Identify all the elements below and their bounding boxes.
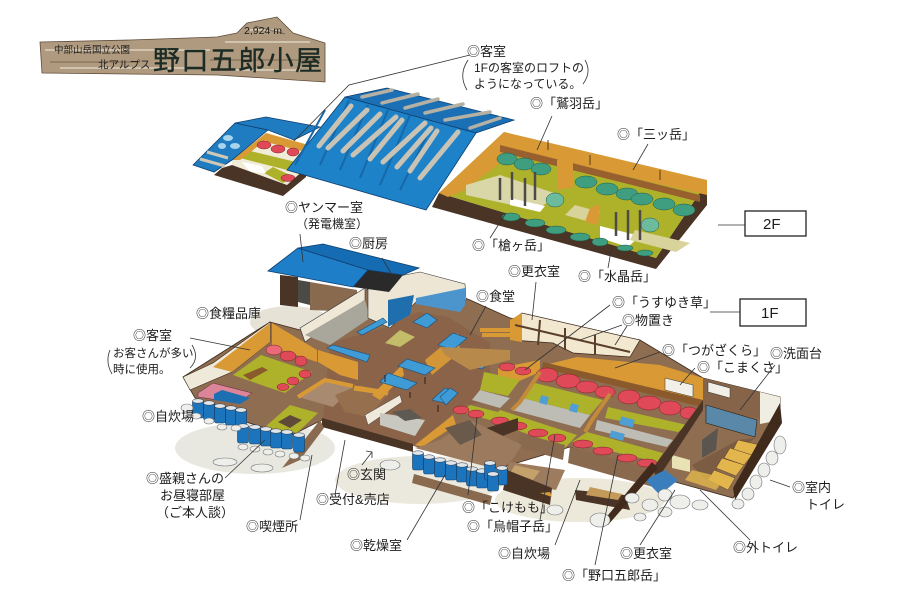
floor 2 tag: [718, 211, 806, 236]
label: eboshi: ◎「烏帽子岳」: [467, 519, 558, 534]
floor 2 illustration: [193, 88, 707, 269]
label: nap room: ◎盛親さんの: [146, 471, 224, 486]
label: indoor toilet: ◎室内: [792, 480, 831, 495]
bunks of room block B: [512, 372, 698, 487]
label: food storage: ◎食糧品庫: [196, 306, 261, 321]
label: nap room: [146, 471, 234, 520]
label: yanmar room: [285, 200, 368, 231]
label: self-catering left: ◎自炊場: [142, 409, 194, 424]
arrow: entrance: [362, 451, 372, 465]
label: entrance: ◎玄関: [347, 467, 386, 482]
leader lines: [190, 55, 790, 565]
busy note: お客さんが多い: [113, 346, 194, 360]
dark outer walls: [282, 400, 782, 500]
label: self-catering right: ◎自炊場: [498, 546, 550, 561]
label: washiba: ◎「鷲羽岳」: [530, 96, 608, 111]
label: usuyukiso: ◎「うすゆき草」: [612, 295, 716, 310]
roof logs front: [319, 106, 458, 178]
label: storage: ◎物置き: [622, 313, 674, 328]
left guest room: [183, 322, 317, 404]
floor 2 tag: 2F: [763, 216, 781, 233]
region: 北アルプス: [98, 59, 150, 71]
title sign: [40, 17, 325, 82]
label: guest room 1F: [108, 328, 196, 376]
label: outdoor toilet: ◎外トイレ: [733, 540, 798, 555]
olive floor and wooden walls: [432, 132, 707, 269]
label: yarigatake: ◎「槍ヶ岳」: [472, 238, 550, 253]
middle rooms: [265, 333, 460, 447]
label: kokemomo: ◎「こけもも」: [462, 500, 553, 515]
label: guest room 1F: ◎客室: [133, 328, 172, 343]
hut name: 野口五郎小屋: [153, 46, 323, 76]
floor 1 illustration: [175, 244, 786, 527]
floor 1 tag: [710, 299, 806, 326]
label: indoor toilet: トイレ: [806, 497, 845, 512]
label: yanmar room: ◎ヤンマー室: [285, 200, 363, 215]
label: mitsudake: ◎「三ッ岳」: [617, 127, 695, 142]
label: drying room: ◎乾燥室: [350, 538, 402, 553]
label: changing room 2: ◎更衣室: [620, 546, 672, 561]
dining tables: [327, 313, 495, 412]
back wall and shelves of large room: [440, 313, 703, 407]
label: guest room 1F: 時に使用。: [113, 362, 170, 376]
label: guest room loft: ◎客室: [467, 44, 506, 59]
label: indoor toilet: [792, 480, 845, 512]
label: changing room 1: ◎更衣室: [508, 264, 560, 279]
main wooden floor: [183, 280, 780, 498]
label: komakusa: ◎「こまくさ」: [697, 360, 788, 375]
label: noguchigoro: ◎「野口五郎岳」: [562, 568, 666, 583]
label: dining: ◎食堂: [476, 289, 515, 304]
label: yanmar room: （発電機室）: [296, 217, 368, 231]
ground wash: [175, 306, 665, 522]
label: reception and shop: ◎受付&売店: [316, 492, 390, 507]
elevation: 2,924 m: [244, 25, 282, 37]
label: kitchen: ◎厨房: [349, 236, 388, 251]
water barrels: [192, 399, 508, 491]
green futons front: [502, 213, 520, 221]
label: washstand: ◎洗面台: [770, 346, 822, 361]
washroom and toilets: [672, 378, 780, 490]
roof logs back: [362, 90, 500, 128]
park name: 中部山岳国立公園: [54, 44, 130, 56]
front porch and cook area: [412, 420, 678, 525]
label: guest room loft: [463, 44, 588, 91]
label: suisho: ◎「水晶岳」: [578, 269, 656, 284]
kitchen roof: [353, 270, 403, 292]
small annex room: [193, 117, 320, 196]
label: nap room: お昼寝部屋: [160, 488, 225, 503]
green futons back left: [497, 153, 517, 165]
loft note: 1Fの客室のロフトの: [474, 61, 584, 75]
main blue roof: [287, 88, 514, 210]
label: smoking: ◎喫煙所: [246, 519, 298, 534]
foundation stones: [181, 404, 786, 527]
floor 1 tag: 1F: [761, 305, 779, 322]
label: guest room loft: ようになっている。: [474, 77, 581, 91]
label: nap room: （ご本人談）: [156, 505, 234, 520]
kitchen: [268, 244, 466, 345]
green futons back right: [575, 176, 597, 188]
wooden board: [40, 17, 325, 82]
dining floor planks: [323, 312, 490, 447]
bunks of room block A: [453, 363, 615, 460]
label: tsugazakura: ◎「つがざくら」: [662, 343, 766, 358]
